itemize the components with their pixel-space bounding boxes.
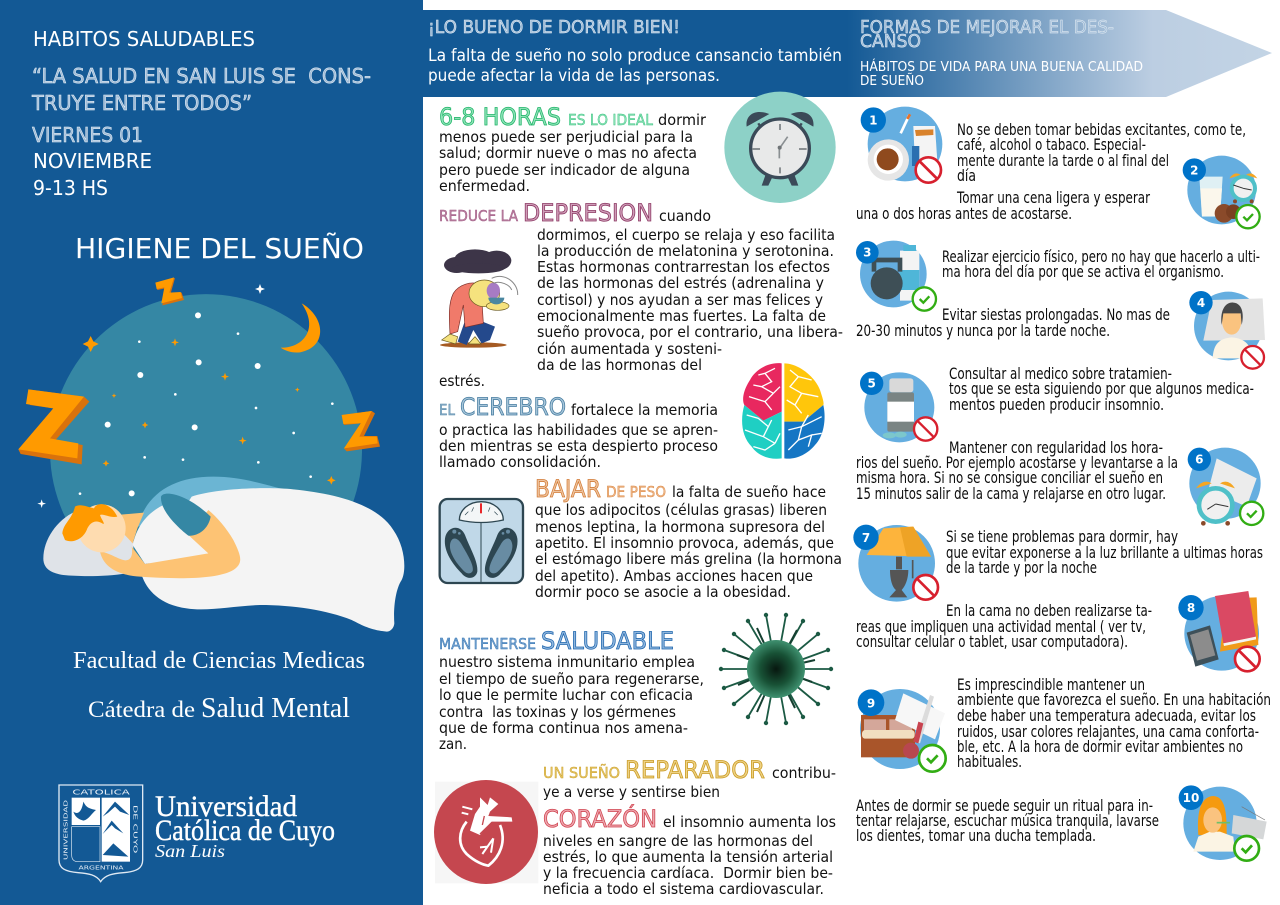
- text block: corazon: [543, 803, 836, 898]
- event heading: HABITOS SALUDABLES: [33, 27, 255, 51]
- illustration: person sleeping under the night sky: [18, 277, 404, 632]
- icon 5: medicine bottle: [860, 372, 937, 442]
- icon 4: man on pillow: 4: [1197, 296, 1205, 310]
- text block: tip 7: [946, 528, 1263, 577]
- text block: tip 6: [856, 439, 1178, 503]
- event heading: [31, 27, 371, 200]
- icon 3: kettlebell and bottle: [856, 241, 936, 311]
- text block: tip 1: mente durante la tarde o al final del: [957, 152, 1169, 170]
- panel: improvements header arrow: CANSO: [860, 31, 921, 52]
- text block: 6-8 horas: 6-8 HORAS: [439, 103, 561, 131]
- text block: bajar de peso: BAJAR: [535, 475, 601, 503]
- text block: corazon: y la frecuencia cardíaca. Dormir bien be-: [543, 864, 833, 882]
- text block: 6-8 horas: salud; dormir nueve o mas no afecta: [439, 144, 697, 162]
- faculty text: [73, 648, 365, 724]
- panel: benefits header band: ¡LO BUENO DE DORMIR BIEN!: [428, 17, 680, 38]
- text block: tip 9: habituales.: [957, 753, 1022, 771]
- icon 8: books and phone: [1178, 591, 1260, 671]
- icon: brain: [742, 363, 825, 459]
- text block: tip 2: Tomar una cena ligera y esperar: [956, 189, 1150, 207]
- text block: depresion: la producción de melatonina y serotonina.: [537, 242, 834, 260]
- text block: tip 10: los dientes, tomar una ducha templada.: [856, 827, 1096, 845]
- panel: improvements header arrow: HÁBITOS DE VIDA PARA UNA BUENA CALIDAD: [860, 59, 1143, 75]
- icon: alarm clock: [724, 92, 836, 203]
- university name: [155, 790, 335, 861]
- icon 4: man on pillow: [1189, 291, 1265, 369]
- text block: tip 3: [942, 248, 1260, 281]
- moon: [281, 303, 320, 353]
- university name: Universidad: [155, 790, 297, 823]
- blanket back: [137, 477, 287, 527]
- event heading: VIERNES 01: [32, 123, 143, 147]
- text block: cerebro: [439, 393, 718, 471]
- text block: corazon: CORAZÓN: [543, 803, 657, 833]
- faculty text: Cátedra de: [88, 697, 195, 722]
- icon 1: coffee and tobacco: [861, 107, 942, 183]
- head: [78, 504, 126, 552]
- text block: depresion: de las hormonas del estrés (adrenalina y: [537, 274, 824, 292]
- text block: 6-8 horas: pero puede ser indicador de alguna: [439, 161, 690, 179]
- university shield logo: DE CUYO: [131, 805, 137, 854]
- text block: mantenerse saludable: MANTENERSE: [439, 635, 536, 653]
- event heading: 9-13 HS: [33, 176, 108, 200]
- text block: tip 1: café, alcohol o tabaco. Especial-: [957, 136, 1146, 154]
- torso: [133, 505, 208, 564]
- text block: tip 8: [856, 602, 1152, 651]
- text block: mantenerse saludable: el tiempo de sueño para regenerarse,: [439, 670, 704, 688]
- icon 10: woman brushing teeth and radio: 10: [1183, 791, 1199, 805]
- text block: tip 4: 20-30 minutos y nunca por la tarde noche.: [856, 322, 1110, 340]
- icon: heart: [434, 780, 538, 884]
- icon: virus: [719, 613, 833, 725]
- text block: tip 10: [856, 797, 1159, 845]
- university shield logo: CATOLICA: [72, 789, 130, 797]
- text block: depresion: da de las hormonas del: [537, 356, 702, 374]
- text block: mantenerse saludable: nuestro sistema inmunitario emplea: [439, 653, 695, 671]
- text block: corazon: el insomnio aumenta los: [663, 813, 836, 831]
- text block: tip 8: En la cama no deben realizarse ta-: [946, 602, 1152, 620]
- text block: tip 7: de la tarde y por la noche: [946, 559, 1097, 577]
- text block: tip 8: reas que impliquen una actividad mental ( ver tv,: [856, 618, 1146, 636]
- text block: un sueño reparador: UN SUEÑO: [543, 763, 620, 782]
- text block: bajar de peso: menos leptina, la hormona supresora del: [535, 518, 825, 536]
- text block: corazon: estrés, lo que aumenta la tensión arterial: [543, 848, 833, 866]
- text block: tip 2: una o dos horas antes de acostarse.: [856, 205, 1072, 223]
- text block: depresion: dormimos, el cuerpo se relaja y eso facilita: [537, 226, 835, 244]
- text block: tip 1: [957, 121, 1246, 185]
- text block: tip 10: tentar relajarse, escuchar música tranquila, lavarse: [856, 812, 1159, 830]
- icon 8: books and phone: 8: [1187, 601, 1195, 615]
- text block: tip 2: [856, 189, 1150, 223]
- panel: improvements header arrow: FORMAS DE MEJORAR EL DES-: [860, 17, 1114, 38]
- university shield logo: [59, 785, 143, 882]
- text block: 6-8 horas: ES LO IDEAL: [568, 111, 654, 129]
- text block: tip 6: Mantener con regularidad los hora-: [949, 439, 1163, 457]
- text block: depresion: cuando: [659, 207, 711, 225]
- university name: Católica de Cuyo: [155, 814, 335, 847]
- text block: depresion: sueño provoca, por el contrario, una libera-: [537, 323, 843, 341]
- text block: corazon: neficia a todo el sistema cardiovascular.: [543, 880, 824, 898]
- text block: depresion: Estas hormonas contrarrestan los efectos: [537, 258, 830, 276]
- panel: improvements header arrow: [847, 10, 1272, 97]
- panel: benefits header band: [423, 10, 847, 97]
- text block: cerebro: o practica las habilidades que se apren-: [439, 421, 718, 439]
- icon: bathroom scale: [440, 499, 523, 583]
- text block: cerebro: CEREBRO: [460, 393, 566, 421]
- right z: [342, 411, 380, 451]
- text block: depresion: estrés.: [439, 372, 485, 390]
- text block: 6-8 horas: dormir: [658, 111, 707, 129]
- university shield logo: ARGENTINA: [78, 866, 124, 872]
- text block: bajar de peso: que los adipocitos (células grasas) liberen: [535, 501, 827, 519]
- icon 10: woman brushing teeth and radio: [1179, 785, 1267, 861]
- text block: un sueño reparador: contribu-: [772, 764, 836, 782]
- text block: un sueño reparador: [543, 756, 836, 801]
- title: HIGIENE DEL SUEÑO: [75, 232, 364, 265]
- university name: San Luis: [155, 841, 225, 861]
- text block: tip 9: [957, 676, 1271, 771]
- event heading: NOVIEMBRE: [33, 149, 152, 173]
- text block: mantenerse saludable: contra las toxinas y los gérmenes: [439, 703, 676, 721]
- text block: tip 7: Si se tiene problemas para dormir, hay: [946, 528, 1178, 546]
- text block: bajar de peso: apetito. El insomnio provoca, además, que: [535, 534, 834, 552]
- text block: depresion: REDUCE LA: [439, 207, 519, 225]
- text block: un sueño reparador: REPARADOR: [625, 756, 765, 784]
- icon 2: milk, clock and cookies: [1183, 156, 1260, 228]
- icon 5: medicine bottle: 5: [867, 377, 876, 391]
- panel: left cover: [0, 0, 423, 905]
- text block: cerebro: den mientras se esta despierto proceso: [439, 437, 718, 455]
- text block: tip 10: Antes de dormir se puede seguir un ritual para in-: [856, 797, 1153, 815]
- event heading: TRUYE ENTRE TODOS”: [31, 91, 252, 115]
- panel: improvements header arrow: DE SUEÑO: [860, 73, 924, 89]
- text block: 6-8 horas: menos puede ser perjudicial para la: [439, 128, 693, 146]
- icon 3: kettlebell and bottle: 3: [863, 246, 872, 260]
- text block: cerebro: fortalece la memoria: [571, 401, 718, 419]
- text block: tip 8: consultar celular o tablet, usar computadora).: [856, 633, 1128, 651]
- text block: tip 6: rios del sueño. Por ejemplo acostarse y levantarse a la: [856, 454, 1178, 472]
- icon 9: bed and thermometer: [858, 689, 946, 772]
- text block: depresion: [439, 199, 843, 390]
- icon 6: pillow and alarm clock: 6: [1195, 453, 1204, 467]
- blanket: [142, 488, 404, 632]
- text block: cerebro: EL: [439, 401, 456, 419]
- arm: [100, 510, 240, 578]
- icon 6: pillow and alarm clock: [1188, 448, 1263, 526]
- text block: bajar de peso: DE PESO: [606, 483, 666, 501]
- panel: benefits header band: puede afectar la vida de las personas.: [428, 66, 720, 86]
- icon 7: lamp: [853, 525, 938, 602]
- big Z: [18, 389, 89, 464]
- text block: depresion: cortisol) y nos ayudan a ser mas felices y: [537, 291, 823, 309]
- text block: tip 6: misma hora. Si no se consigue conciliar el sueño en: [856, 469, 1163, 487]
- text block: mantenerse saludable: zan.: [439, 735, 467, 753]
- text block: depresion: DEPRESION: [523, 199, 653, 227]
- text block: tip 4: [856, 306, 1170, 340]
- text block: tip 5: mentos pueden producir insomnio.: [949, 396, 1164, 414]
- text block: mantenerse saludable: lo que le permite luchar con eficacia: [439, 686, 693, 704]
- text block: bajar de peso: [535, 475, 842, 601]
- icon 9: bed and thermometer: 9: [867, 696, 875, 710]
- text block: corazon: niveles en sangre de las hormonas del: [543, 832, 813, 850]
- text block: bajar de peso: la falta de sueño hace: [672, 483, 826, 501]
- panel: benefits header band: La falta de sueño no solo produce cansancio también: [428, 46, 842, 66]
- text block: tip 9: Es imprescindible mantener un: [957, 676, 1145, 694]
- text block: tip 6: 15 minutos salir de la cama y relajarse en otro lugar.: [856, 485, 1166, 503]
- text block: tip 4: Evitar siestas prolongadas. No mas de: [942, 306, 1170, 324]
- text block: tip 5: Consultar al medico sobre tratamien-: [949, 365, 1172, 383]
- text block: 6-8 horas: enfermedad.: [439, 177, 530, 195]
- pillow: [43, 512, 133, 576]
- text block: 6-8 horas: [439, 103, 707, 195]
- faculty text: Salud Mental: [201, 692, 350, 724]
- text block: tip 1: día: [957, 167, 976, 185]
- text block: mantenerse saludable: que de forma continua nos amena-: [439, 719, 688, 737]
- text block: tip 5: [949, 365, 1254, 414]
- text block: bajar de peso: dormir poco se asocie a la obesidad.: [535, 583, 791, 601]
- stars: [37, 284, 334, 508]
- text block: un sueño reparador: ye a verse y sentirse bien: [543, 783, 720, 801]
- text block: bajar de peso: del apetito). Ambas acciones hacen que: [535, 567, 813, 585]
- hair: [62, 504, 117, 541]
- text block: mantenerse saludable: [439, 627, 704, 753]
- icon 1: coffee and tobacco: 1: [869, 114, 878, 128]
- text block: mantenerse saludable: SALUDABLE: [541, 627, 674, 655]
- event heading: “LA SALUD EN SAN LUIS SE CONS-: [32, 64, 371, 88]
- sleeve: [161, 494, 211, 536]
- faculty text: Facultad de Ciencias Medicas: [73, 648, 365, 674]
- icon 7: lamp: 7: [862, 531, 870, 545]
- icon 2: milk, clock and cookies: 2: [1190, 163, 1199, 177]
- icon: sad character under cloud: [440, 249, 518, 348]
- top z: [155, 277, 184, 305]
- text block: bajar de peso: el estómago libere más grelina (la hormona: [535, 550, 842, 568]
- text block: cerebro: llamado consolidación.: [439, 453, 601, 471]
- text block: depresion: ción aumentada y sosteni-: [537, 340, 722, 358]
- text block: depresion: emocionalmente mas fuertes. La falta de: [537, 307, 826, 325]
- university shield logo: UNIVERSIDAD: [64, 799, 70, 860]
